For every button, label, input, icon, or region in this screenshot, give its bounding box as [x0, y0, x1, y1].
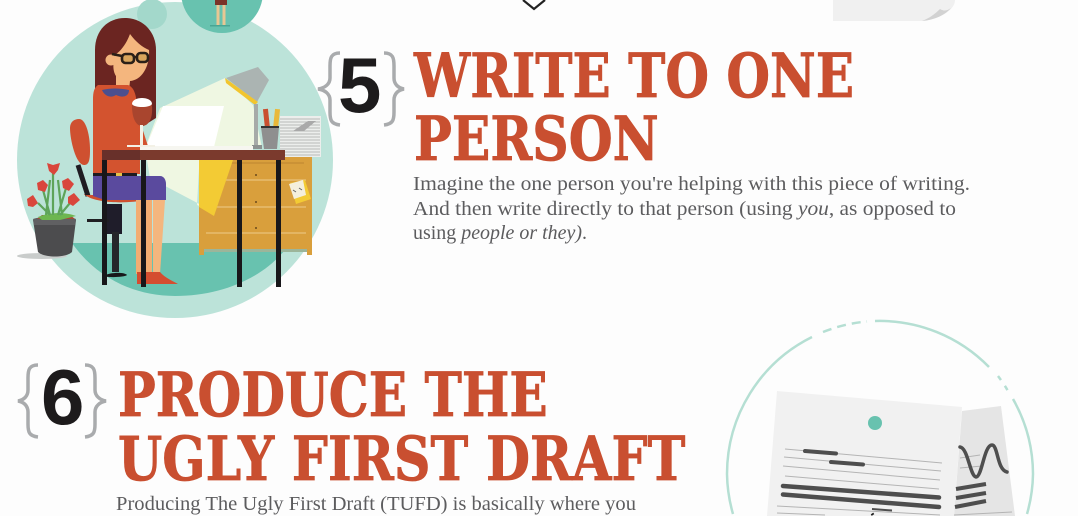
legs	[136, 200, 152, 274]
text block: step 5 body	[413, 174, 970, 244]
heading: write to one person	[413, 41, 854, 175]
step number 6 with braces: 6	[41, 353, 84, 441]
page dot	[868, 416, 882, 430]
background circle	[17, 2, 333, 318]
thought bubble with person	[181, 0, 263, 33]
office chair	[70, 119, 140, 277]
yellow paper on drawers	[199, 160, 233, 216]
light beam	[145, 78, 262, 216]
woman face and neck	[106, 34, 149, 90]
pencil holder	[261, 109, 280, 149]
glasses	[112, 53, 148, 63]
paper stack	[280, 116, 321, 157]
text block: step 5 body: And then write directly to that person (using you, as opposed to	[413, 199, 956, 220]
heading: produce the ugly first draft: UGLY FIRST DRAFT	[118, 423, 686, 495]
woman hair	[95, 18, 156, 130]
flower pot	[17, 163, 80, 259]
text block: step 6 body: Producing The Ugly First Draft (TUFD) is basically where you	[116, 494, 636, 515]
sticky note	[289, 180, 311, 204]
step number 5 with braces	[318, 41, 404, 129]
page text lines	[777, 449, 942, 515]
chest of drawers	[199, 157, 312, 255]
heading: produce the ugly first draft	[118, 360, 686, 495]
belt and skirt	[93, 173, 166, 200]
sweater	[93, 85, 148, 174]
icon: curled paper corner at top	[833, 0, 955, 21]
shoes	[137, 272, 178, 284]
step number 6 with braces	[18, 353, 106, 441]
text block: step 5 body: Imagine the one person you're helping with this piece of writing.	[413, 174, 970, 195]
wine glass	[127, 98, 155, 147]
floor	[72, 243, 290, 296]
thought bubble small	[137, 0, 167, 29]
back page scribble and lines	[954, 445, 1012, 515]
heading: produce the ugly first draft: PRODUCE THE	[118, 360, 548, 431]
laptop	[146, 106, 224, 147]
broken circle outline	[727, 321, 1033, 514]
illustration: draft documents in dashed circle	[727, 321, 1033, 516]
heading: write to one person: PERSON	[414, 103, 659, 175]
desk lamp	[225, 67, 269, 149]
collar	[102, 88, 129, 97]
heading: write to one person: WRITE TO ONE	[413, 41, 854, 112]
step number 5 with braces: 5	[338, 41, 381, 129]
illustration: woman writing at desk	[17, 0, 333, 318]
front page	[767, 391, 962, 516]
text block: step 5 body: using people or they).	[413, 223, 587, 244]
back page	[954, 406, 1015, 516]
desk	[102, 150, 285, 287]
icon: chevron connector at top	[523, 0, 545, 9]
